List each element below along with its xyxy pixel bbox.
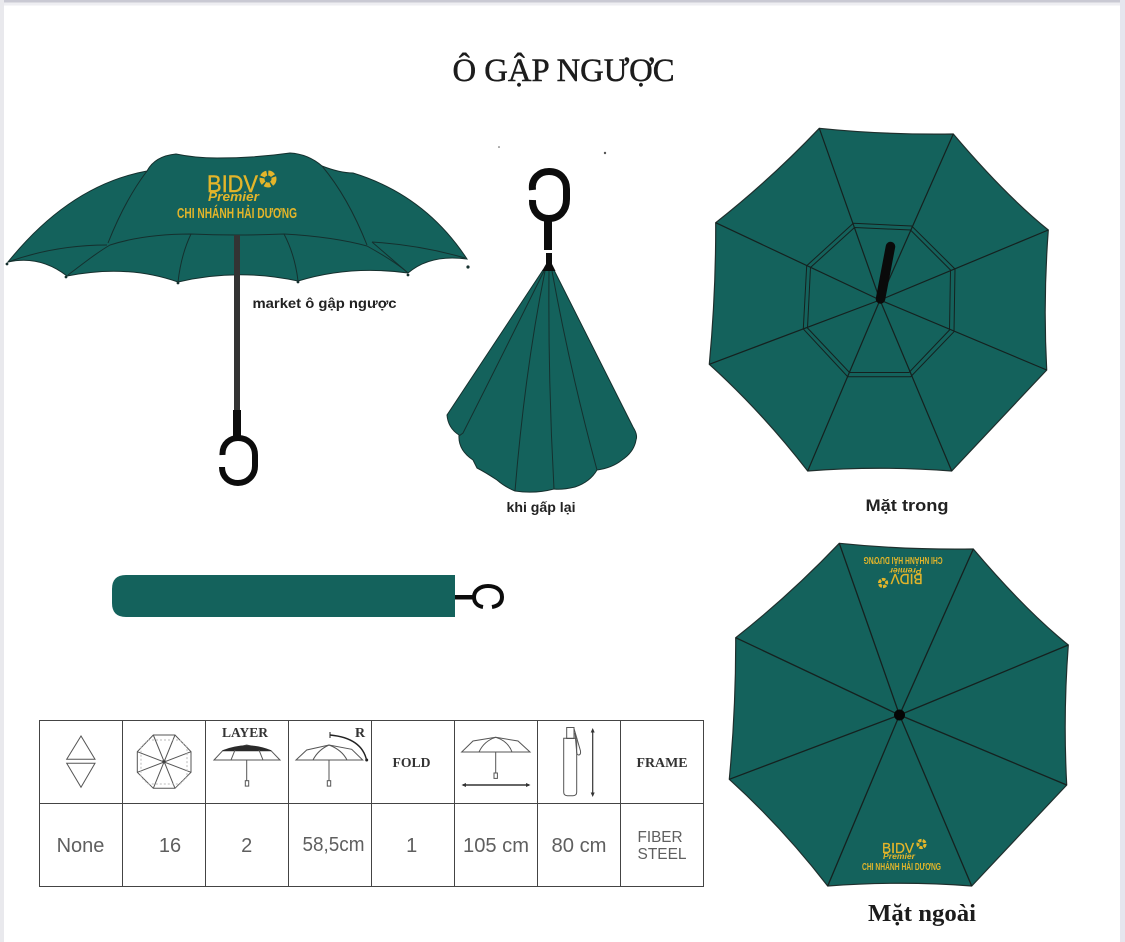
bottom logo: CHI NHÁNH HẢI DƯƠNG	[862, 860, 941, 873]
icon: canopy ribs octagon	[137, 735, 191, 788]
bottom logo: Premier	[883, 852, 916, 861]
label: market: market ô gập ngược	[252, 296, 397, 311]
ribs	[729, 543, 1068, 886]
rib tips	[6, 263, 470, 284]
BIDV logo on canopy	[177, 171, 297, 222]
sleeve	[112, 575, 455, 617]
top inverted logo: CHI NHÁNH HẢI DƯƠNG	[863, 554, 943, 567]
icon: layered umbrella	[214, 745, 280, 786]
centre cap	[894, 710, 905, 720]
handle seen from inside	[880, 246, 890, 299]
BIDV logo on canopy: Premier	[208, 190, 260, 204]
BIDV logo on canopy: BIDV	[207, 171, 258, 198]
values row: 105 cm	[463, 835, 529, 857]
ferrule	[542, 264, 556, 271]
top inverted logo: BIDV	[891, 570, 923, 587]
label: folded: khi gấp lại	[506, 499, 576, 515]
label: inner face: Mặt trong	[866, 496, 948, 515]
canopy octagon	[709, 128, 1048, 471]
handle grip	[233, 410, 241, 437]
canopy folds	[459, 271, 597, 491]
icon: radius umbrella	[296, 732, 368, 786]
handle stem	[544, 219, 552, 250]
folded umbrella in sleeve	[112, 575, 502, 617]
values row	[57, 829, 687, 863]
header: fold: FOLD	[392, 756, 430, 771]
hook handle	[532, 172, 566, 218]
values row: 2	[241, 835, 252, 857]
header: R: R	[355, 726, 366, 741]
C hook handle	[222, 438, 255, 483]
canopy	[8, 153, 467, 282]
top inverted logo	[863, 554, 943, 587]
values row: 58,5cm	[302, 834, 364, 856]
open umbrella side view	[6, 153, 470, 483]
header: layer: LAYER	[222, 726, 269, 741]
table grid	[40, 720, 704, 886]
values row: FIBER	[638, 829, 682, 846]
hook	[474, 586, 502, 607]
bottom logo	[862, 840, 941, 873]
bottom logo: BIDV	[882, 840, 914, 857]
ribs	[709, 128, 1048, 471]
outside view of canopy	[729, 543, 1068, 886]
stem	[455, 595, 474, 600]
canopy octagon	[729, 543, 1068, 886]
BIDV logo on canopy: CHI NHÁNH HẢI DƯƠNG	[177, 205, 297, 222]
values row: 80 cm	[552, 835, 606, 857]
top inverted logo: Premier	[889, 566, 922, 575]
umbrella shaft	[234, 235, 240, 412]
values row: 16	[159, 835, 181, 857]
values row: 1	[406, 835, 417, 857]
canopy seams	[8, 166, 465, 282]
stray dots	[498, 146, 606, 154]
values row: None	[57, 835, 104, 857]
icon: two triangles	[67, 736, 95, 787]
values row: STEEL	[638, 846, 687, 863]
folded hanging umbrella	[447, 146, 637, 492]
header: frame: FRAME	[636, 756, 688, 771]
inside view of canopy	[709, 128, 1048, 471]
icon: width umbrella	[462, 737, 530, 787]
title: Ô GẬP NGƯỢC	[452, 51, 674, 89]
icon: length closed umbrella	[564, 728, 595, 797]
label: outer face: Mặt ngoài	[868, 901, 976, 927]
specification table	[40, 720, 704, 886]
canopy	[447, 270, 637, 492]
double inner ring	[803, 223, 955, 377]
